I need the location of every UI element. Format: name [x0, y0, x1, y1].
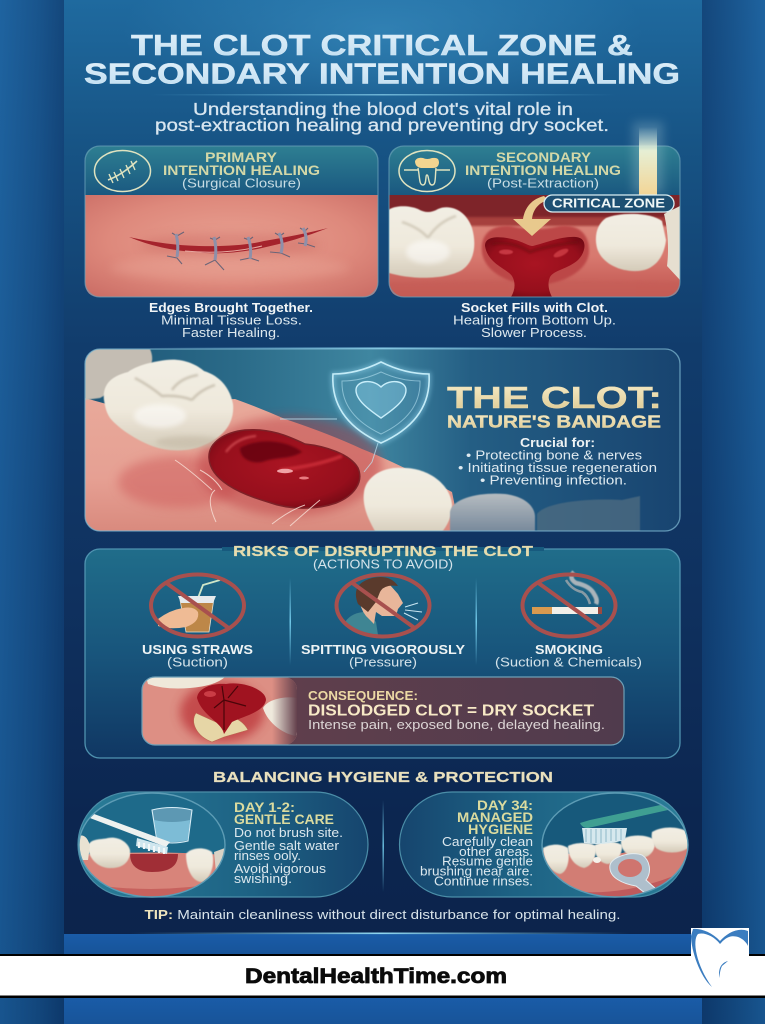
risk labels: (Pressure) [349, 656, 417, 670]
critical zone label: CRITICAL ZONE [552, 196, 665, 210]
title: SECONDARY INTENTION HEALING [84, 58, 680, 90]
subtitle [155, 99, 609, 135]
socket [482, 226, 589, 285]
risk labels: USING STRAWS [142, 642, 253, 657]
callout: consequence: CONSEQUENCE: [308, 689, 418, 703]
day 3-4 text: DAY 34: [477, 798, 533, 813]
illustration: dry socket [142, 677, 297, 745]
blood clot [209, 430, 360, 508]
risk labels: (Suction) [167, 656, 228, 670]
day 3-4 text [420, 798, 533, 888]
arrow: to socket [513, 196, 551, 236]
primary heading: PRIMARY [205, 150, 277, 165]
title: THE CLOT CRITICAL ZONE & [131, 30, 633, 62]
risk labels: SMOKING [535, 642, 603, 657]
clot benefits [458, 435, 657, 488]
tooth: front small [364, 468, 452, 536]
day 1-2 text: rinses ooly. [234, 848, 301, 863]
illustration: clot in socket [85, 349, 680, 536]
clot heading [447, 380, 662, 432]
callout: consequence: Intense pain, exposed bone, delayed healing. [308, 717, 605, 732]
title [84, 30, 680, 90]
day 1-2 text: GENTLE CARE [234, 812, 334, 827]
primary heading: (Surgical Closure) [182, 176, 301, 190]
day 3-4 text: Continue rinses. [434, 874, 533, 888]
bottom blue bar [64, 932, 702, 1024]
day 1-2 text: Gentle salt water [234, 838, 340, 853]
illustration: sutured incision [85, 195, 378, 297]
tooth: back [85, 349, 152, 400]
gum [85, 398, 460, 531]
illustration: socket with clot [386, 195, 680, 297]
panel: day 1-2 gentle care [78, 792, 368, 897]
caption: primary: Minimal Tissue Loss. [161, 312, 302, 328]
illustration: brush and floss [541, 792, 689, 897]
subtitle: post-extraction healing and preventing dry socket. [155, 115, 609, 135]
tooth: right [596, 214, 666, 271]
risks heading [233, 543, 533, 572]
tooth: grey [450, 494, 535, 533]
caption: secondary: Slower Process. [481, 325, 587, 340]
subtitle: Understanding the blood clot's vital role in [193, 99, 573, 119]
icon: sutures [94, 150, 150, 192]
clot benefits: Crucial for: [520, 435, 595, 450]
panel: day 3-4 managed hygiene [400, 792, 689, 897]
secondary heading: (Post-Extraction) [487, 176, 599, 190]
day 1-2 text: DAY 1-2: [234, 800, 295, 815]
day 3-4 text: MANAGED [457, 810, 533, 825]
caption: primary: Edges Brought Together. [149, 300, 313, 315]
secondary heading: INTENTION HEALING [465, 163, 621, 178]
footer banner: DentalHealthTime.com [245, 965, 507, 988]
clot benefits: • Protecting bone & nerves [466, 448, 643, 462]
caption: secondary: Healing from Bottom Up. [453, 312, 616, 328]
footer banner [0, 954, 765, 998]
tooth: left molar [386, 206, 474, 278]
day 1-2 text [234, 800, 343, 886]
clot benefits: • Preventing infection. [480, 472, 627, 488]
illustration: rinse and brush [78, 792, 226, 897]
icon: shield with heart [280, 362, 429, 472]
risk labels [142, 642, 642, 670]
day 3-4 text: Carefully clean [442, 834, 533, 849]
tooth: molar [104, 360, 233, 450]
risk labels: (Suction & Chemicals) [495, 656, 642, 670]
secondary heading: SECONDARY [496, 150, 591, 165]
day 3-4 text: HYGIENE [468, 822, 533, 837]
risk labels: SPITTING VIGOROUSLY [301, 642, 465, 657]
icon: tooth in gum [399, 150, 455, 192]
panel: the clot, nature's bandage [85, 348, 680, 536]
clot heading: THE CLOT: [447, 380, 662, 415]
blood clot [485, 237, 584, 297]
day 1-2 text: Avoid vigorous [234, 861, 327, 876]
critical zone label [544, 195, 674, 212]
panel: primary intention healing [85, 146, 378, 297]
tip: TIP: Maintain cleanliness without direct disturbance for optimal healing. [144, 907, 620, 922]
secondary heading [465, 150, 621, 190]
icon: no spitting [336, 574, 430, 636]
primary heading: INTENTION HEALING [163, 163, 320, 178]
callout: consequence [142, 677, 624, 745]
callout: consequence: DISLODGED CLOT = DRY SOCKET [308, 702, 595, 720]
risks heading: (ACTIONS TO AVOID) [313, 558, 453, 572]
caption: secondary [453, 300, 616, 340]
day 3-4 text: brushing near aire. [420, 864, 533, 878]
caption: secondary: Socket Fills with Clot. [461, 300, 608, 315]
icon: no smoking [522, 572, 616, 636]
icon: no straws [151, 574, 244, 636]
panel: risks of disrupting the clot [85, 543, 680, 758]
risks heading: RISKS OF DISRUPTING THE CLOT [233, 543, 533, 560]
day 3-4 text: other areas. [459, 844, 533, 859]
primary heading [163, 150, 320, 190]
critical zone beam [633, 122, 663, 195]
caption: primary: Faster Healing. [182, 325, 280, 340]
caption: primary [149, 300, 313, 340]
clot heading: NATURE'S BANDAGE [447, 412, 661, 432]
panel: secondary intention healing [386, 122, 680, 297]
heading: balancing hygiene and protection: BALANCING HYGIENE & PROTECTION [213, 769, 553, 786]
day 1-2 text: Do not brush site. [234, 825, 343, 840]
icon: tooth logo [691, 928, 749, 987]
day 1-2 text: swishing. [234, 871, 292, 886]
day 3-4 text: Resume gentle [442, 854, 533, 868]
clot benefits: • Initiating tissue regeneration [458, 460, 657, 475]
